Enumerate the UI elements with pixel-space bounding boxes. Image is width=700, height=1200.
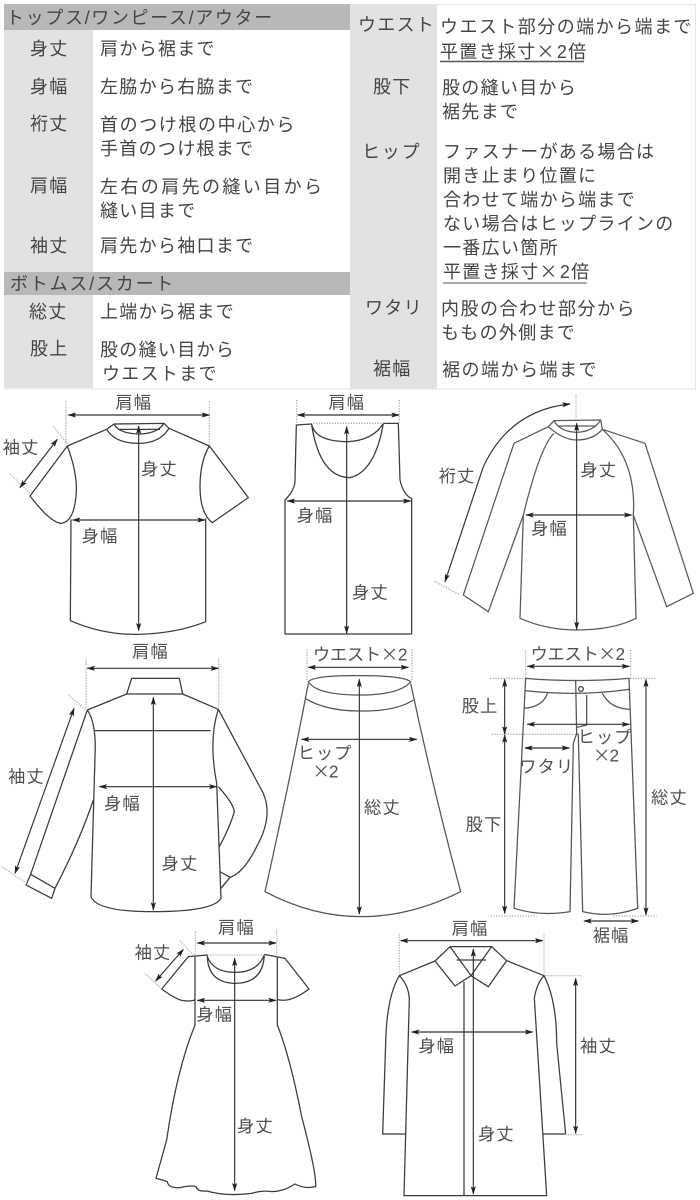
row: waist xyxy=(358,15,693,64)
diagram: skirt: ヒップ xyxy=(298,743,352,763)
diagram: trousers: 裾幅 xyxy=(593,925,629,945)
diagram: long-sleeve shirt: 肩幅 xyxy=(132,642,169,662)
diagram: coat: 身幅 xyxy=(418,1036,455,1056)
diagram: raglan sweater: 裄丈 xyxy=(439,466,475,486)
heading: tops / one-piece / outerwear: トップス/ワンピース/アウター xyxy=(6,8,274,28)
diagram: dress xyxy=(135,917,316,1195)
row: rise: 股上 xyxy=(30,339,69,359)
diagram: dress: 身幅 xyxy=(196,1004,233,1024)
row: total length xyxy=(29,302,235,322)
row: waist: ウエスト部分の端から端まで xyxy=(440,17,693,37)
diagram: tank top: 肩幅 xyxy=(328,393,365,413)
row: inseam: 股の縫い目から xyxy=(442,78,577,98)
panel: tops and bottoms definitions xyxy=(4,4,350,388)
row: sleeve from neck: 手首のつけ根まで xyxy=(100,139,254,159)
diagram: t-shirt xyxy=(3,393,248,634)
row: hip: 合わせて端から端まで xyxy=(443,190,636,210)
row: hem width: 裾幅 xyxy=(373,359,412,379)
row: hip: ファスナーがある場合は xyxy=(443,142,655,162)
diagram: coat: 肩幅 xyxy=(452,918,488,938)
row: sleeve length: 袖丈 xyxy=(30,236,69,256)
diagram: tank top: 身丈 xyxy=(352,582,389,602)
row: shoulder width xyxy=(30,176,324,221)
row: total length: 総丈 xyxy=(29,302,68,322)
diagram: trousers: ×2 xyxy=(593,742,619,767)
diagram: skirt: ×2 xyxy=(313,757,338,782)
row: thigh: ももの外側まで xyxy=(441,323,576,343)
row: hip: 平置き採寸×2倍 xyxy=(443,258,590,284)
row: waist: ウエスト xyxy=(358,15,435,35)
row: body length: 身丈 xyxy=(30,39,69,59)
diagram: skirt xyxy=(265,641,461,917)
diagram: dress: 肩幅 xyxy=(218,917,255,937)
row: hip: 一番広い箇所 xyxy=(443,238,559,258)
diagram: trousers: 総丈 xyxy=(651,788,688,808)
diagram: trousers: ワタリ xyxy=(519,757,574,777)
row: shoulder width: 肩幅 xyxy=(30,176,69,196)
diagram: raglan sweater: 身幅 xyxy=(531,518,568,538)
diagram: t-shirt: 袖丈 xyxy=(3,437,39,457)
diagram: raglan sweater xyxy=(434,395,693,630)
row: sleeve from neck: 首のつけ根の中心から xyxy=(100,115,296,135)
row: waist: 平置き採寸×2倍 xyxy=(440,38,587,64)
diagram: trousers: ウエスト×2 xyxy=(531,640,625,665)
diagram: long-sleeve shirt: 身丈 xyxy=(162,853,198,873)
row: body length: 肩から裾まで xyxy=(100,39,216,59)
heading: bottoms / skirts xyxy=(4,272,350,295)
diagram: trousers: 股上 xyxy=(462,696,498,716)
heading: bottoms / skirts: ボトムス/スカート xyxy=(10,274,175,294)
diagram: trousers: 股下 xyxy=(466,814,502,834)
diagram: coat: 袖丈 xyxy=(580,1036,617,1056)
diagram: long-sleeve shirt: 身幅 xyxy=(104,793,141,813)
diagram: dress: 袖丈 xyxy=(135,943,171,963)
row: hip xyxy=(362,142,675,284)
row: sleeve length: 肩先から袖口まで xyxy=(100,236,254,256)
diagram: long-sleeve shirt xyxy=(2,642,267,912)
diagram: t-shirt: 身丈 xyxy=(141,459,178,479)
row: body length xyxy=(30,39,216,59)
row: sleeve from neck: 裄丈 xyxy=(30,114,69,134)
row: inseam xyxy=(373,77,577,122)
row: hem width xyxy=(373,359,598,380)
row: rise xyxy=(30,339,235,384)
row: body width: 左脇から右脇まで xyxy=(100,77,254,97)
diagram: skirt: 総丈 xyxy=(364,797,401,817)
diagram: trousers: ヒップ xyxy=(578,727,632,747)
row: shoulder width: 縫い目まで xyxy=(100,201,196,221)
row: body width xyxy=(30,77,254,97)
row: thigh xyxy=(365,298,636,343)
row: hip: ない場合はヒップラインの xyxy=(443,214,675,234)
row: sleeve from neck xyxy=(30,114,296,159)
row: inseam: 股下 xyxy=(373,77,412,97)
diagram: raglan sweater: 身丈 xyxy=(580,460,617,480)
row: sleeve length xyxy=(30,236,254,256)
row: thigh: 内股の合わせ部分から xyxy=(441,299,636,319)
row: body width: 身幅 xyxy=(30,77,69,97)
panel: waist, inseam, hip definitions xyxy=(4,4,696,389)
diagram: trousers xyxy=(462,640,688,945)
diagram: t-shirt: 肩幅 xyxy=(115,393,152,413)
diagram: skirt: ウエスト×2 xyxy=(313,641,407,666)
row: inseam: 裾先まで xyxy=(442,102,519,122)
row: rise: ウエストまで xyxy=(102,364,218,384)
row: hip: 開き止まり位置に xyxy=(443,166,597,186)
diagram: coat xyxy=(383,918,617,1196)
diagram: t-shirt: 身幅 xyxy=(82,526,118,546)
row: hem width: 裾の端から端まで xyxy=(442,360,598,380)
diagram: dress: 身丈 xyxy=(237,1116,274,1136)
diagram: tank top xyxy=(285,393,412,634)
row: thigh: ワタリ xyxy=(365,298,423,318)
diagram: tank top: 身幅 xyxy=(297,506,333,526)
row: hip: ヒップ xyxy=(362,142,421,162)
row: shoulder width: 左右の肩先の縫い目から xyxy=(100,177,324,197)
heading: tops / one-piece / outerwear xyxy=(4,4,350,30)
row: rise: 股の縫い目から xyxy=(100,340,235,360)
diagram: long-sleeve shirt: 袖丈 xyxy=(8,767,45,787)
row: total length: 上端から裾まで xyxy=(100,302,235,322)
diagram: coat: 身丈 xyxy=(478,1124,515,1144)
